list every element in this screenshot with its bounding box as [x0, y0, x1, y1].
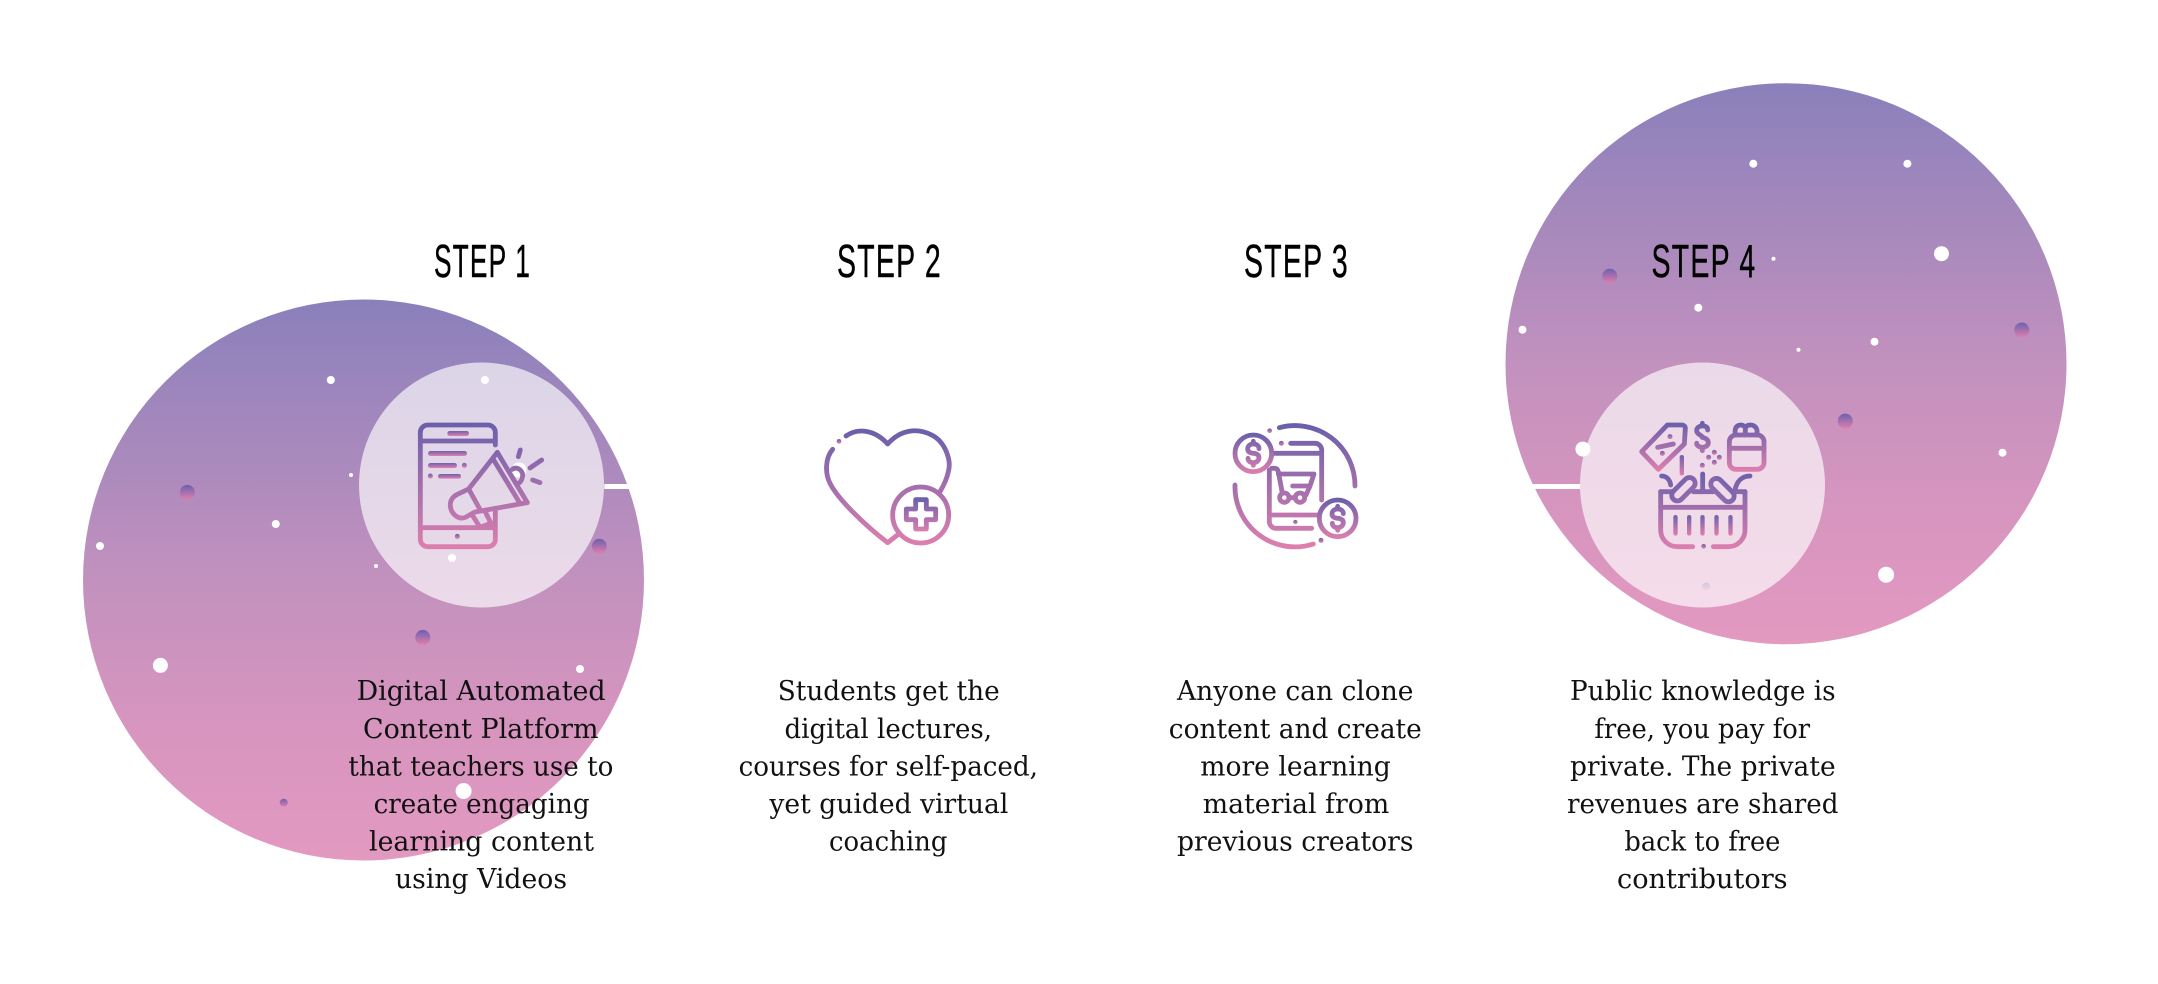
icon: heart with plus [827, 431, 949, 543]
text block: step 2 description: coaching [829, 827, 948, 858]
text block: step 1 description: create engaging [374, 789, 590, 820]
icon: phone with megaphone [420, 425, 542, 547]
text block: step 3 description: previous creators [1177, 827, 1414, 858]
text block: step 4 description: free, you pay for [1594, 714, 1810, 745]
text block: step 1 description: using Videos [395, 864, 567, 895]
text block: step 3 description [1169, 676, 1422, 858]
text block: step 4 description: revenues are shared [1567, 789, 1838, 820]
text block: step 2 description: digital lectures, [784, 714, 992, 745]
text block: step 1 description: that teachers use to [348, 751, 613, 782]
heading: step 1: STEP 1 [434, 235, 531, 287]
panel: step 4 background circle [1506, 83, 2066, 644]
text block: step 2 description: courses for self-paced, [739, 751, 1038, 782]
text block: step 3 description: more learning [1200, 751, 1391, 782]
heading: step 4: STEP 4 [1652, 235, 1756, 287]
text block: step 4 description: back to free [1624, 827, 1780, 858]
heading: step 2: STEP 2 [837, 235, 942, 287]
text block: step 4 description: Public knowledge is [1570, 676, 1836, 707]
text block: step 3 description: material from [1203, 789, 1389, 820]
panel: step 4 icon disc [1580, 362, 1825, 608]
text block: step 1 description: Digital Automated [357, 676, 606, 707]
text block: step 1 description [348, 676, 613, 895]
text block: step 4 description [1567, 676, 1838, 895]
text block: step 2 description: yet guided virtual [768, 789, 1008, 820]
text block: step 2 description: Students get the [778, 676, 1000, 707]
text block: step 1 description: learning content [369, 827, 594, 858]
text block: step 4 description: contributors [1617, 864, 1788, 895]
text block: step 3 description: Anyone can clone [1176, 676, 1414, 707]
icon: phone shopping with coins [1235, 426, 1356, 547]
heading: step 3: STEP 3 [1244, 235, 1349, 287]
panel: step 1 icon disc [359, 362, 604, 608]
text block: step 4 description: private. The private [1570, 751, 1836, 782]
panel: step 1 background circle [83, 300, 644, 860]
icon: shopping basket with tag, dollar and gift [1642, 423, 1764, 549]
text block: step 2 description [739, 676, 1038, 858]
text block: step 3 description: content and create [1169, 714, 1422, 745]
text block: step 1 description: Content Platform [363, 714, 598, 745]
